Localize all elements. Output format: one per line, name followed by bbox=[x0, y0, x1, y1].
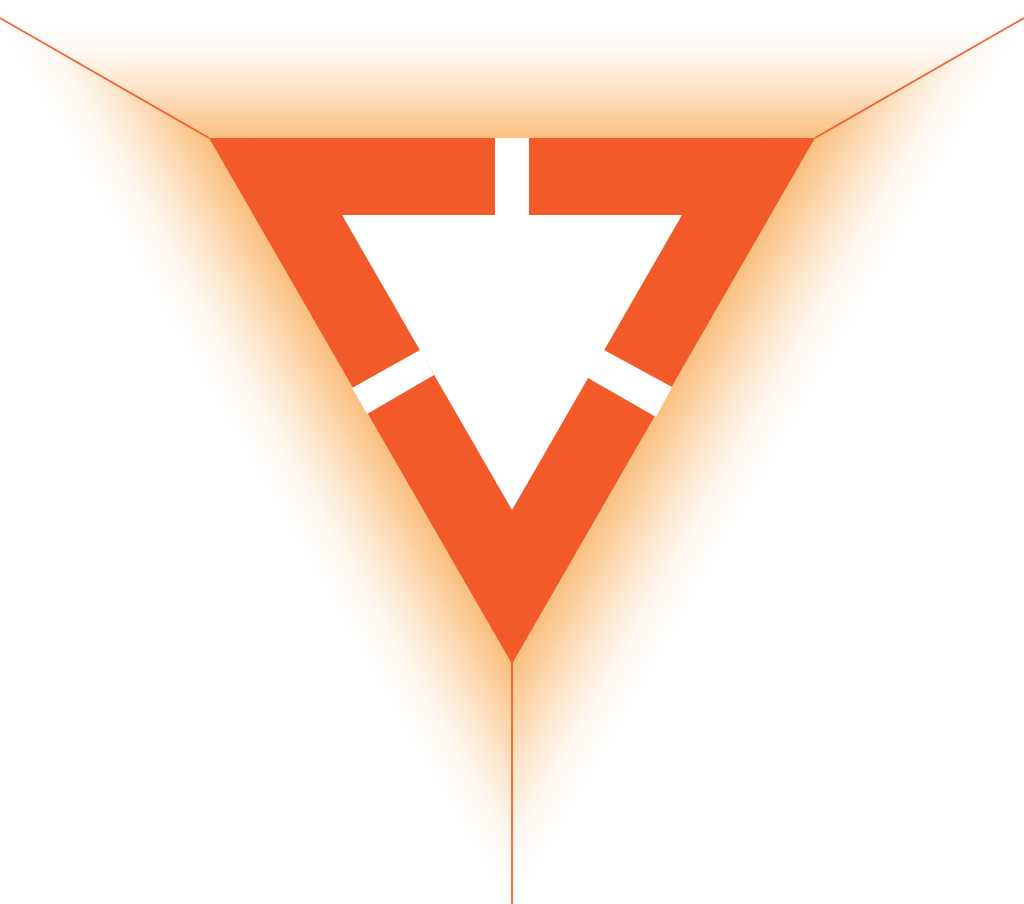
orange triangle bbox=[209, 138, 815, 664]
notch: right bbox=[588, 350, 672, 417]
glow: left side bbox=[0, 18, 512, 904]
line: bottom bbox=[511, 663, 513, 904]
line: upper right bbox=[815, 18, 1024, 138]
notch: left bbox=[352, 350, 434, 414]
white inner triangle with connecting notches bbox=[342, 138, 682, 510]
glow: top side bbox=[0, 18, 1024, 138]
glow: right side bbox=[512, 18, 1024, 904]
inner triangle bbox=[342, 215, 682, 510]
line: upper left bbox=[0, 18, 209, 138]
notch: top bbox=[495, 138, 529, 216]
